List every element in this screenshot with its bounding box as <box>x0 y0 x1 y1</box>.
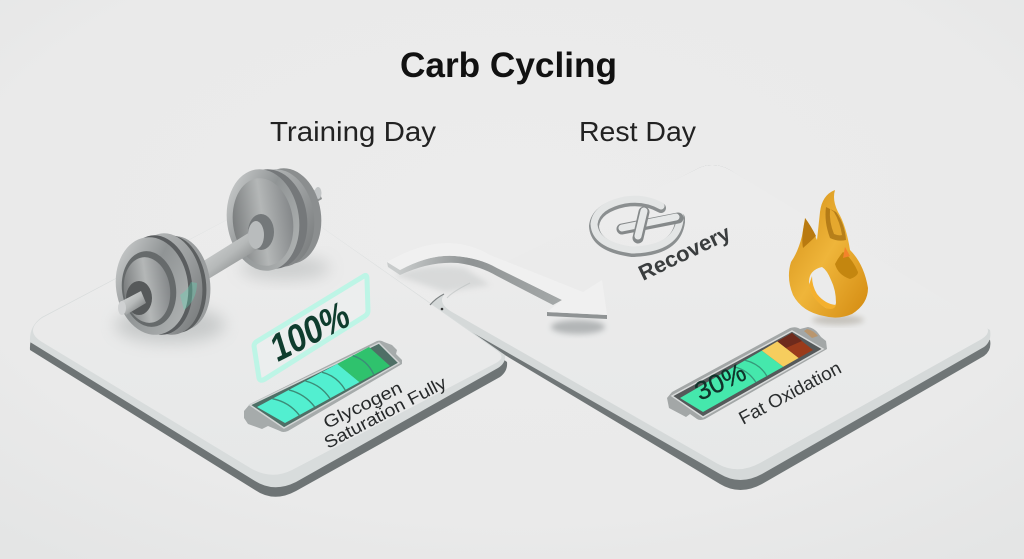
icon: low battery <box>667 327 827 420</box>
panel: training day platform <box>30 200 507 497</box>
icon: recovery symbol <box>594 199 680 252</box>
panel: rest day platform edge <box>432 165 990 490</box>
title: Carb Cycling <box>400 46 617 85</box>
text: 30%: 30% <box>690 357 751 406</box>
label: recovery: Recovery <box>635 221 734 286</box>
label: glycogen saturation: Glycogen <box>320 377 405 433</box>
heading: training day: Training Day <box>270 116 436 147</box>
text: 100%: 100% <box>263 294 357 370</box>
label: fat oxidation: Fat Oxidation <box>735 357 845 429</box>
icon: dumbbell <box>110 164 330 343</box>
heading: rest day: Rest Day <box>579 116 696 147</box>
panel: rest day platform surface <box>430 165 988 469</box>
arrow: training to rest <box>387 243 607 334</box>
icon: glowing 100% label <box>254 275 368 380</box>
icon: gold flame <box>789 190 868 325</box>
arrow top face <box>387 243 607 315</box>
label: glycogen saturation: Saturation Fully <box>321 372 450 453</box>
arrow underside <box>387 256 562 305</box>
icon: full battery <box>244 341 402 432</box>
